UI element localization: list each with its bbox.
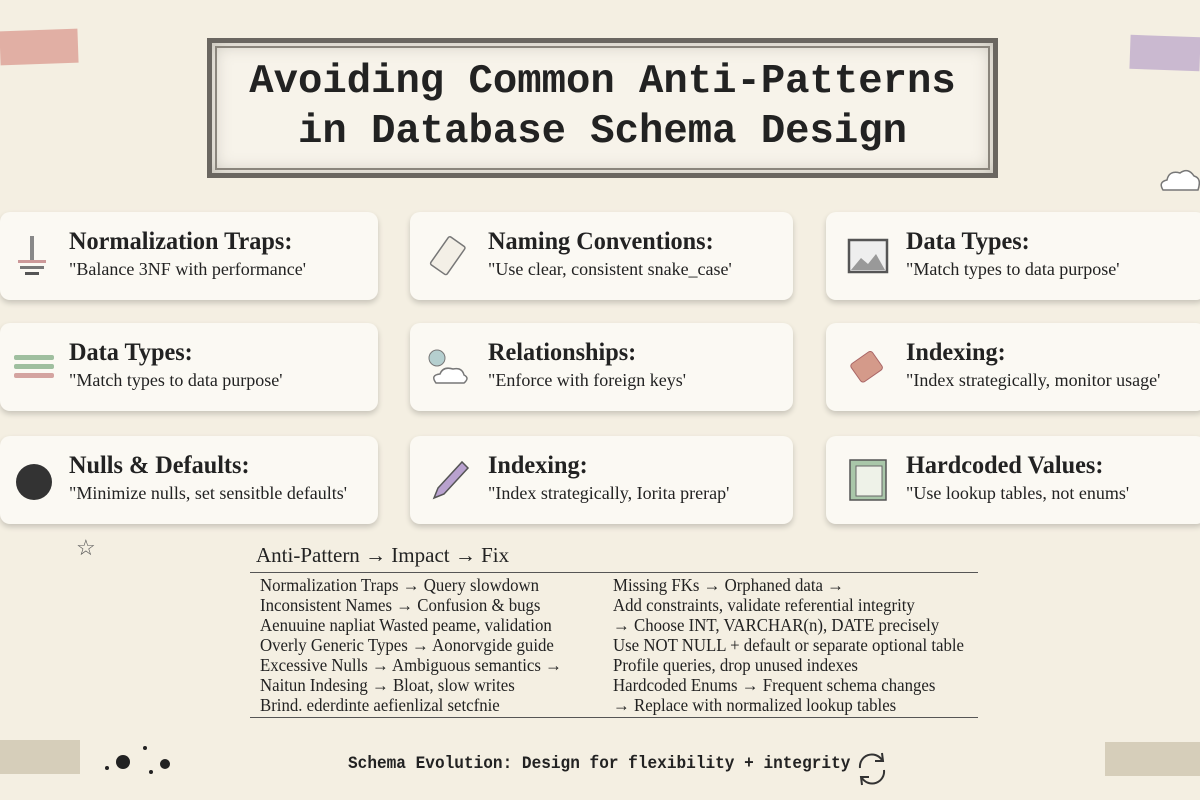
card: normalization traps: "Balance 3NF with performance' (69, 259, 306, 279)
table right column: → Replace with normalized lookup tables (613, 695, 896, 715)
ink splatter (105, 746, 170, 774)
card: indexing middle (410, 436, 793, 524)
table left column: Naitun Indesing → Bloat, slow writes (260, 675, 515, 695)
table heading: Anti-Pattern → Impact → Fix (256, 543, 509, 567)
icon: bars (14, 355, 54, 378)
icon: pen (432, 461, 469, 500)
table right column: Add constraints, validate referential integrity (613, 595, 915, 615)
card: indexing middle: "Index strategically, Iorita prerap' (488, 483, 729, 503)
card: naming conventions: Naming Conventions: (488, 228, 714, 255)
card: hardcoded values: "Use lookup tables, not enums' (906, 483, 1129, 503)
card: data types: Data Types: (69, 339, 193, 366)
card: naming conventions: "Use clear, consistent snake_case' (488, 259, 732, 279)
table left column: Inconsistent Names → Confusion & bugs (260, 595, 540, 615)
card: indexing top: Indexing: (906, 339, 1006, 366)
icon: picture (848, 238, 888, 274)
title: Avoiding Common Anti-Patterns (249, 59, 956, 105)
card: data types: "Match types to data purpose' (69, 370, 283, 390)
table right column: → Choose INT, VARCHAR(n), DATE precisely (613, 615, 939, 635)
table left column: Brind. ederdinte aefienlizal setcfnie (260, 695, 500, 715)
card: nulls & defaults: Nulls & Defaults: (69, 452, 250, 479)
card: hardcoded values: Hardcoded Values: (906, 452, 1103, 479)
card: data types top: Data Types: (906, 228, 1030, 255)
icon: cloud (428, 350, 468, 384)
icon: cloud top-right (1160, 170, 1200, 191)
icon: star doodle: ☆ (76, 535, 96, 560)
table right column: Profile queries, drop unused indexes (613, 655, 858, 675)
table left column: Overly Generic Types → Aonorvgide guide (260, 635, 554, 655)
tape: bottom-right (1105, 742, 1200, 776)
icon: book (849, 459, 887, 501)
tape: top-left (0, 29, 79, 65)
icon: balance (18, 236, 46, 275)
icon: black ball (16, 464, 52, 500)
card: indexing top (826, 323, 1200, 411)
icon: ticket (430, 236, 466, 276)
table right column: Use NOT NULL + default or separate optional table (613, 635, 964, 655)
table right column (613, 575, 964, 715)
card: hardcoded values (826, 436, 1200, 524)
card: relationships: "Enforce with foreign keys' (488, 370, 686, 390)
table left column (260, 575, 562, 715)
card: normalization traps (0, 212, 378, 300)
card: relationships: Relationships: (488, 339, 636, 366)
card: indexing middle: Indexing: (488, 452, 588, 479)
icon: cycle arrows (858, 752, 886, 786)
card: nulls & defaults (0, 436, 378, 524)
card: naming conventions (410, 212, 793, 300)
footer text: Schema Evolution: Design for flexibility + integrity (348, 754, 850, 774)
card: relationships (410, 323, 793, 411)
table left column: Normalization Traps → Query slowdown (260, 575, 539, 595)
card: data types top: "Match types to data purpose' (906, 259, 1120, 279)
card: normalization traps: Normalization Traps: (69, 228, 292, 255)
card: nulls & defaults: "Minimize nulls, set sensitble defaults' (69, 483, 347, 503)
table right column: Missing FKs → Orphaned data → (613, 575, 844, 595)
table left column: Excessive Nulls → Ambiguous semantics → (260, 655, 562, 675)
tape: bottom-left (0, 740, 80, 774)
card: data types (0, 323, 378, 411)
title: in Database Schema Design (298, 109, 907, 155)
title (207, 38, 998, 178)
table left column: Aenuuine napliat Wasted peame, validation (260, 615, 552, 635)
card: indexing top: "Index strategically, monitor usage' (906, 370, 1160, 390)
table: anti-pattern impact fix (250, 543, 978, 718)
tape: top-right (1129, 35, 1200, 71)
icon: eraser (850, 351, 883, 382)
card: data types top (826, 212, 1200, 300)
table right column: Hardcoded Enums → Frequent schema changes (613, 675, 935, 695)
